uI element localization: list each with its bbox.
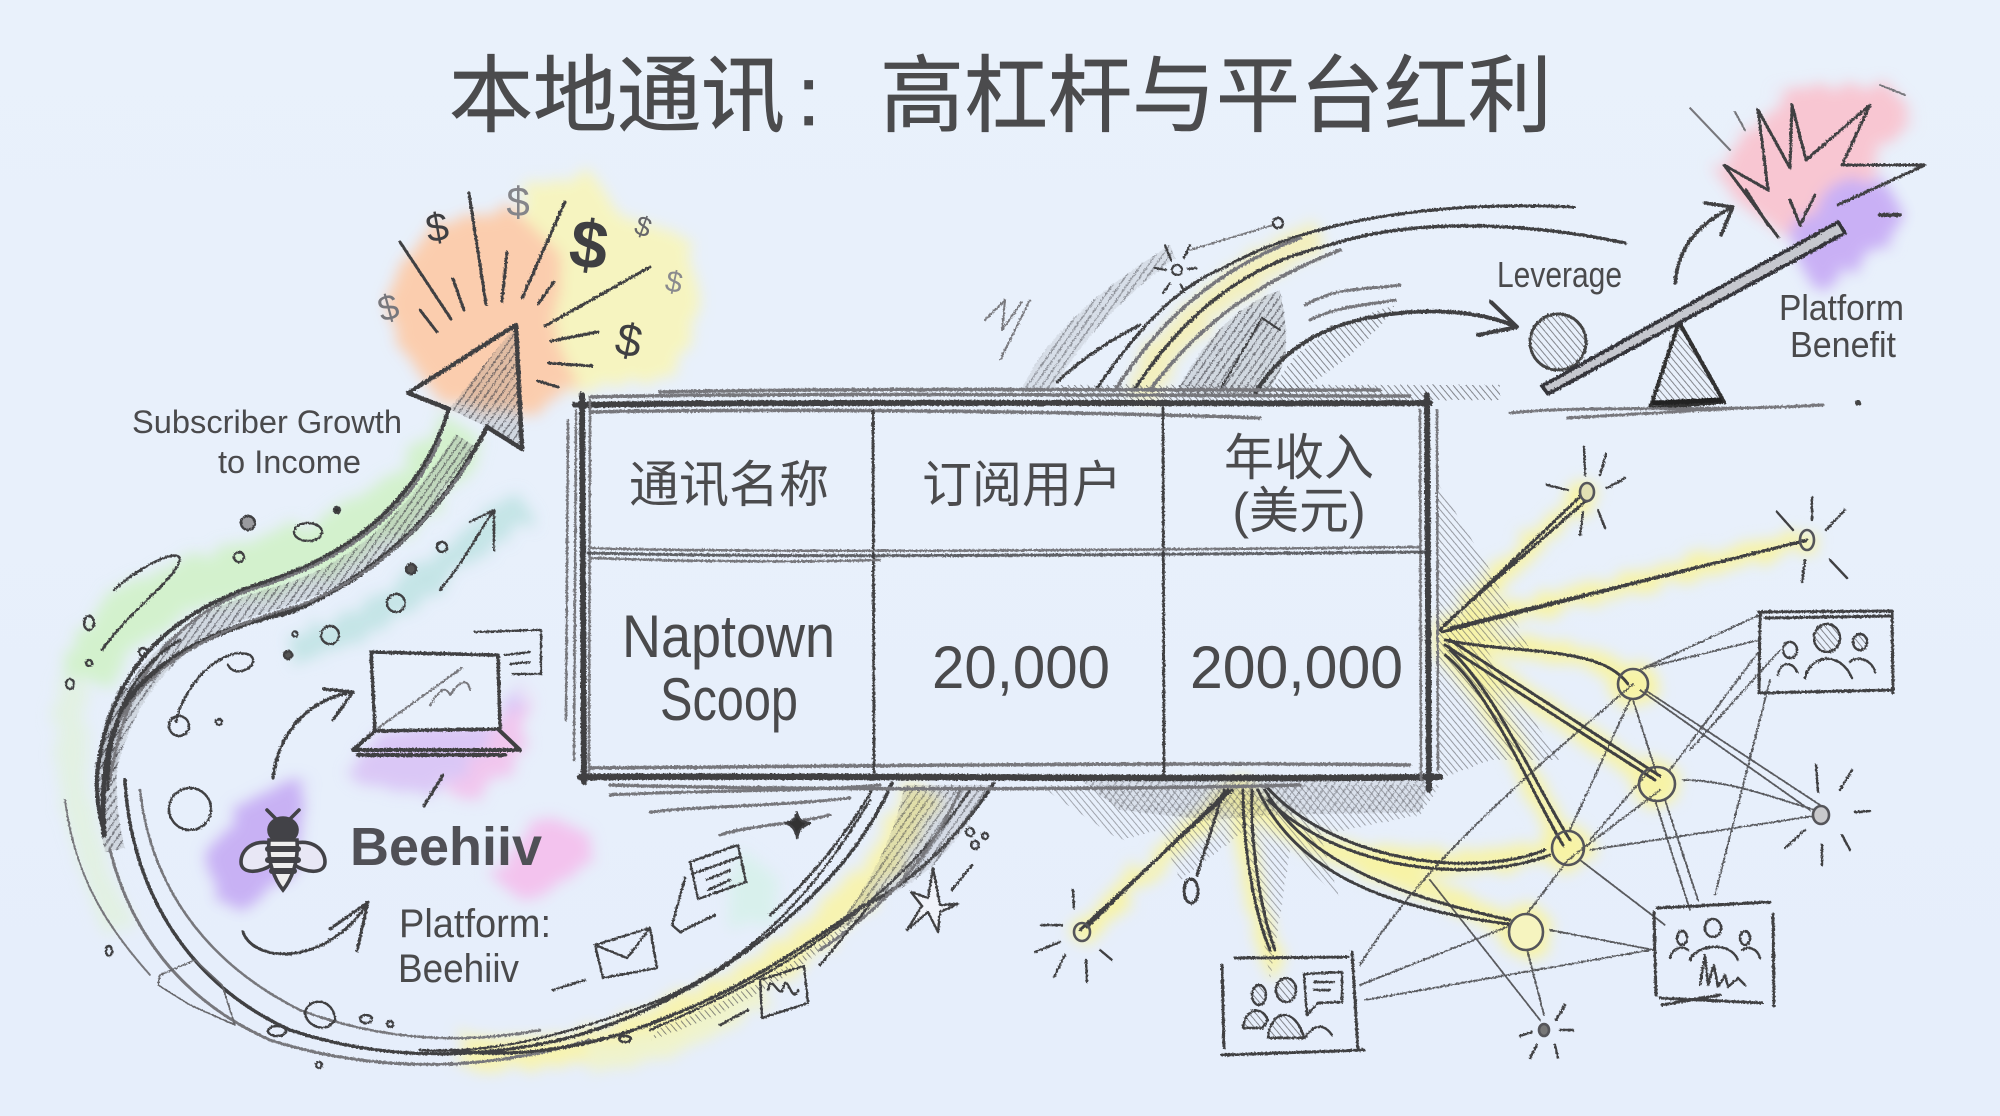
platform benefit label bbox=[1779, 287, 1904, 365]
dollar signs: $ bbox=[662, 265, 686, 300]
arrow head bbox=[449, 325, 522, 449]
small floating icons bbox=[553, 812, 988, 1025]
dollar signs: $ bbox=[373, 285, 403, 330]
icon: document window bbox=[690, 845, 746, 899]
cell: subscriber count: 20,000 bbox=[932, 634, 1110, 701]
thin net lines bbox=[1360, 610, 1820, 1020]
swoosh hatching bbox=[105, 440, 465, 770]
dollar signs: $ bbox=[422, 204, 452, 252]
dollar signs bbox=[373, 178, 686, 368]
swoosh strokes bbox=[1096, 206, 1574, 390]
upper edge bbox=[97, 409, 449, 828]
icon: sparkle bbox=[786, 812, 810, 838]
wash: teal band bbox=[290, 505, 525, 650]
frame strokes bbox=[575, 403, 1430, 405]
swoosh hatching bbox=[1175, 290, 1286, 395]
column dividers bbox=[873, 410, 874, 772]
people box bottom left bbox=[1222, 952, 1364, 1055]
upper swoosh bbox=[985, 206, 1625, 400]
ground bbox=[1510, 405, 1823, 418]
fulcrum bbox=[1650, 322, 1724, 408]
platform label: Beehiiv bbox=[398, 947, 519, 991]
icon: star bbox=[907, 868, 958, 932]
header: annual revenue: (美元) bbox=[1232, 483, 1366, 539]
lower sweep bbox=[125, 780, 892, 1054]
row divider bbox=[588, 552, 1425, 556]
dollar signs: $ bbox=[631, 209, 656, 244]
platform benefit label: Benefit bbox=[1790, 324, 1896, 365]
header: newsletter name: 通讯名称 bbox=[629, 457, 829, 513]
people box top right bbox=[1759, 611, 1893, 693]
cell: newsletter: Scoop bbox=[660, 666, 798, 733]
dollar signs: $ bbox=[611, 312, 647, 368]
pencil rays bbox=[1080, 492, 1807, 950]
icon: squiggle note bbox=[760, 966, 808, 1018]
lower edge bbox=[103, 427, 487, 835]
body bbox=[269, 840, 297, 890]
glow rays bbox=[1082, 492, 1807, 967]
wash: green left edge bbox=[71, 680, 120, 930]
header: annual revenue: 年收入 bbox=[1224, 430, 1374, 486]
arrow to ball bbox=[1255, 302, 1517, 393]
small sun bbox=[1155, 245, 1196, 293]
title: : bbox=[797, 49, 820, 143]
glowing nodes bbox=[1074, 483, 1829, 1036]
subscriber growth label: Subscriber Growth bbox=[132, 404, 402, 440]
bee icon bbox=[241, 810, 325, 890]
wash: yellow behind money bbox=[525, 170, 700, 395]
document behind bbox=[475, 630, 541, 674]
beam bbox=[1542, 222, 1845, 394]
wings bbox=[241, 842, 275, 871]
fan hatching bbox=[1040, 480, 1560, 980]
header: subscribers: 订阅用户 bbox=[922, 457, 1122, 513]
wash: pink explosion bbox=[1715, 85, 1910, 240]
base bbox=[353, 729, 520, 755]
network bbox=[1035, 447, 1893, 1058]
up arrow bbox=[1675, 203, 1733, 283]
beehiiv logo: Beehiiv bbox=[350, 817, 542, 877]
platform label: Platform: bbox=[399, 902, 551, 946]
wash: green band bbox=[85, 430, 465, 680]
subscriber growth label bbox=[132, 404, 402, 480]
icon: envelope bbox=[595, 928, 657, 978]
table bbox=[566, 390, 1440, 790]
seesaw lever bbox=[1510, 85, 1925, 418]
header: annual revenue bbox=[1224, 430, 1374, 539]
wash: orange burst bbox=[385, 205, 578, 415]
people box bottom right bbox=[1654, 902, 1774, 1006]
wash: yellow lower swoosh bbox=[460, 790, 925, 1055]
screen bbox=[371, 652, 500, 731]
wash: laptop purple bbox=[345, 680, 525, 795]
title: 本地通讯 bbox=[449, 49, 785, 143]
platform label bbox=[398, 902, 551, 991]
explosion spikes bbox=[1724, 105, 1925, 237]
wash: beehiiv pink bbox=[490, 815, 590, 905]
subscriber growth label: to Income bbox=[218, 444, 361, 480]
cell: newsletter: Naptown bbox=[622, 603, 835, 670]
sun rays bbox=[1035, 447, 1870, 1058]
dollar signs: $ bbox=[565, 205, 613, 285]
burst rays bbox=[400, 193, 650, 387]
cell: newsletter bbox=[622, 603, 835, 733]
wash: purple explosion bbox=[1790, 175, 1905, 290]
wash: teal mail area bbox=[725, 850, 775, 925]
platform arrow bbox=[243, 902, 368, 954]
arrow to laptop bbox=[273, 689, 353, 778]
title: 高杠杆与平台红利 bbox=[880, 49, 1552, 143]
scattered bubbles and marks bbox=[66, 507, 631, 1068]
wash: laptop pink bbox=[445, 690, 530, 800]
ball bbox=[1530, 314, 1586, 370]
leverage label: Leverage bbox=[1497, 254, 1622, 295]
head and antennae bbox=[269, 818, 297, 842]
growth arrow swoosh bbox=[65, 325, 994, 1064]
grey strokes under table left bbox=[610, 785, 880, 835]
dollar signs: $ bbox=[506, 178, 530, 225]
wash: bee purple bbox=[205, 780, 305, 912]
table grid bbox=[566, 390, 1440, 790]
wash: yellow faint lower bbox=[590, 990, 760, 1062]
platform benefit label: Platform bbox=[1779, 287, 1904, 328]
wash: yellow upper swoosh bbox=[1135, 235, 1320, 395]
laptop icon bbox=[353, 630, 541, 806]
cell: annual revenue: 200,000 bbox=[1190, 634, 1403, 701]
